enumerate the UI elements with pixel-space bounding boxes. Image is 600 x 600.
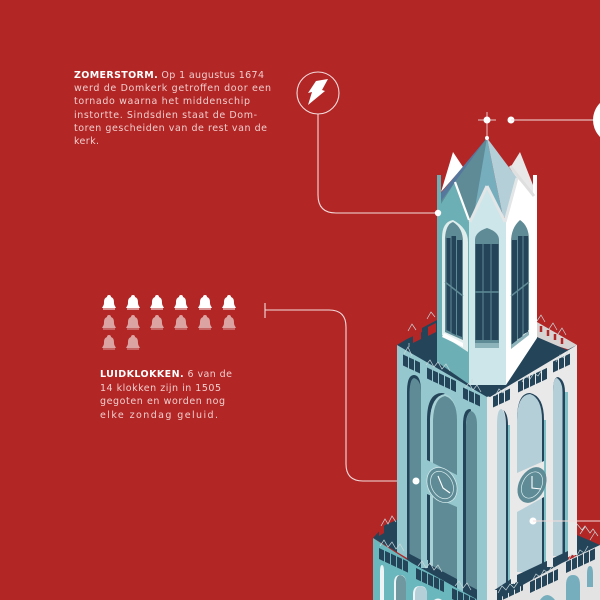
lantern platform dark top — [437, 337, 577, 397]
lantern front face — [469, 187, 506, 385]
text block: zomerstorm: toren gescheiden van de rest van de — [74, 123, 267, 134]
text block: luidklokken: elke zondag geluid. — [100, 410, 218, 421]
text block: zomerstorm — [74, 70, 271, 147]
connector: right wall to right edge — [530, 518, 600, 524]
text block: luidklokken — [100, 369, 232, 421]
icon: large white circle at right edge — [593, 96, 600, 144]
lower battlements — [379, 540, 595, 600]
gable stroke white — [455, 182, 469, 220]
front window — [475, 228, 499, 348]
connector: zomerstorm to tower — [318, 114, 438, 213]
icon grid: 14 bells — [102, 295, 236, 350]
clock: right face — [512, 462, 552, 508]
lantern base dark underlay — [437, 355, 490, 400]
middle section: left wall — [397, 345, 487, 600]
clock: left face — [421, 462, 463, 508]
lantern right face — [506, 175, 537, 385]
upper platform back battlements — [397, 312, 577, 370]
middle section: right wall — [487, 345, 577, 600]
text block: luidklokken: LUIDKLOKKEN. 6 van de — [100, 369, 232, 380]
lantern left face — [437, 175, 470, 385]
text block: zomerstorm: instortte. Sindsdien staat de Dom- — [74, 110, 257, 121]
spire — [441, 138, 517, 220]
bells: six white bells — [102, 295, 236, 310]
lower section walls — [373, 538, 600, 600]
cross on spire — [478, 112, 496, 140]
text block: luidklokken: gegoten en worden nog — [100, 396, 225, 407]
upper battlements — [403, 343, 571, 402]
text block: zomerstorm: werd de Domkerk getroffen door een — [74, 83, 271, 94]
lantern octagon — [437, 138, 537, 385]
lower platform back left — [373, 516, 397, 552]
text block: zomerstorm: kerk. — [74, 136, 99, 147]
gable strokes — [470, 178, 517, 222]
tower illustration — [373, 112, 600, 600]
spikes — [441, 152, 463, 192]
gable strokes light — [510, 166, 534, 196]
lower platform back right — [577, 524, 600, 560]
text block: luidklokken: 14 klokken zijn in 1505 — [100, 383, 221, 394]
connector: spire to top right — [508, 116, 600, 124]
lower dark ledges — [408, 545, 577, 600]
connector: luidklokken to tower — [265, 303, 416, 481]
connector dot: luidklokken — [412, 478, 420, 484]
text block: zomerstorm: ZOMERSTORM. Op 1 augustus 1674 — [74, 70, 264, 81]
connector dot: zomerstorm — [435, 210, 441, 216]
text block: zomerstorm: tornado waarna het middenschip — [74, 96, 250, 107]
icon: lightning bolt in circle — [297, 72, 339, 114]
left window — [442, 220, 468, 352]
bells: eight faded bells — [102, 315, 236, 350]
right window — [511, 220, 529, 349]
